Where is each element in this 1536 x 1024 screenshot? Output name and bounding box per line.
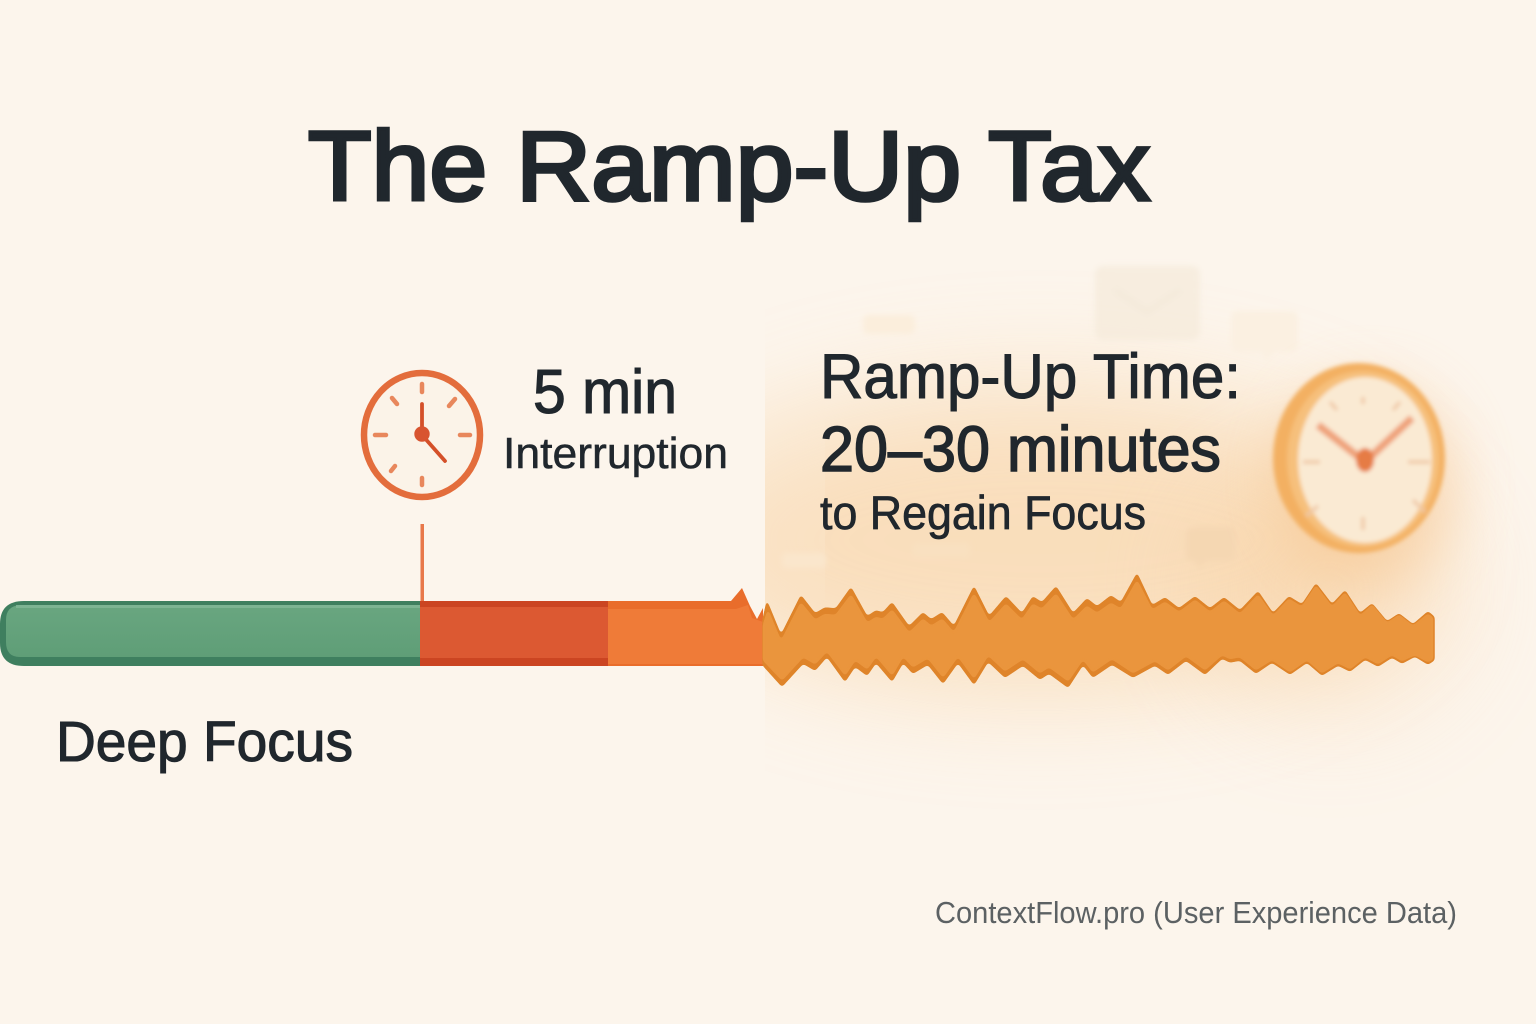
warm glow behind ramp-up section bbox=[670, 360, 1460, 710]
text: Ramp-Up Time: Ramp-Up Time: bbox=[820, 342, 1241, 412]
icon: chat bubble lower left bbox=[782, 553, 826, 568]
segment: noisy ramp-up waveform bbox=[763, 574, 1434, 687]
focus timeline bar bbox=[0, 574, 1434, 687]
source credit: ContextFlow.pro (User Experience Data) bbox=[935, 895, 1457, 930]
clock hands bbox=[1318, 418, 1412, 462]
segment: early recovery bbox=[608, 588, 763, 666]
icon: chat bubble upper left bbox=[863, 315, 915, 334]
icon: blurred clock bbox=[1273, 363, 1460, 580]
text: 20-30 minutes: 20–30 minutes bbox=[820, 413, 1221, 485]
text: Deep Focus: Deep Focus bbox=[56, 710, 353, 774]
text: to Regain Focus: to Regain Focus bbox=[820, 486, 1146, 539]
waveform inner fill bbox=[764, 582, 1432, 680]
faint blurred notification icons bbox=[782, 266, 1298, 569]
infographic canvas bbox=[0, 126, 1496, 930]
clock face bbox=[1298, 377, 1432, 543]
clock rim shade bbox=[1287, 371, 1439, 547]
icon: chat bubble upper right bbox=[1231, 311, 1298, 362]
title: The Ramp-Up Tax bbox=[308, 111, 1150, 221]
interruption marker line bbox=[420, 524, 424, 602]
ramp-up heading bbox=[820, 342, 1241, 539]
clock ring bbox=[364, 373, 480, 497]
clock centre bbox=[1356, 448, 1374, 472]
icon: chat bubble lower bbox=[1186, 527, 1236, 569]
clock hands bbox=[422, 404, 445, 461]
icon: small clock bbox=[364, 373, 480, 497]
text: Interruption: Interruption bbox=[503, 429, 728, 478]
text: 5 min: 5 min bbox=[533, 358, 677, 427]
clock centre bbox=[414, 426, 430, 442]
icon: chat bubble lower middle bbox=[912, 543, 970, 558]
segment: deep focus bbox=[0, 601, 420, 666]
segment: interruption bbox=[420, 601, 608, 666]
clock ticks bbox=[1303, 397, 1430, 530]
clock rim bbox=[1273, 363, 1445, 553]
clock glow bbox=[1276, 380, 1460, 580]
waveform edge bbox=[763, 574, 1434, 687]
icon: envelope bbox=[1095, 266, 1200, 340]
clock ticks bbox=[375, 384, 470, 485]
